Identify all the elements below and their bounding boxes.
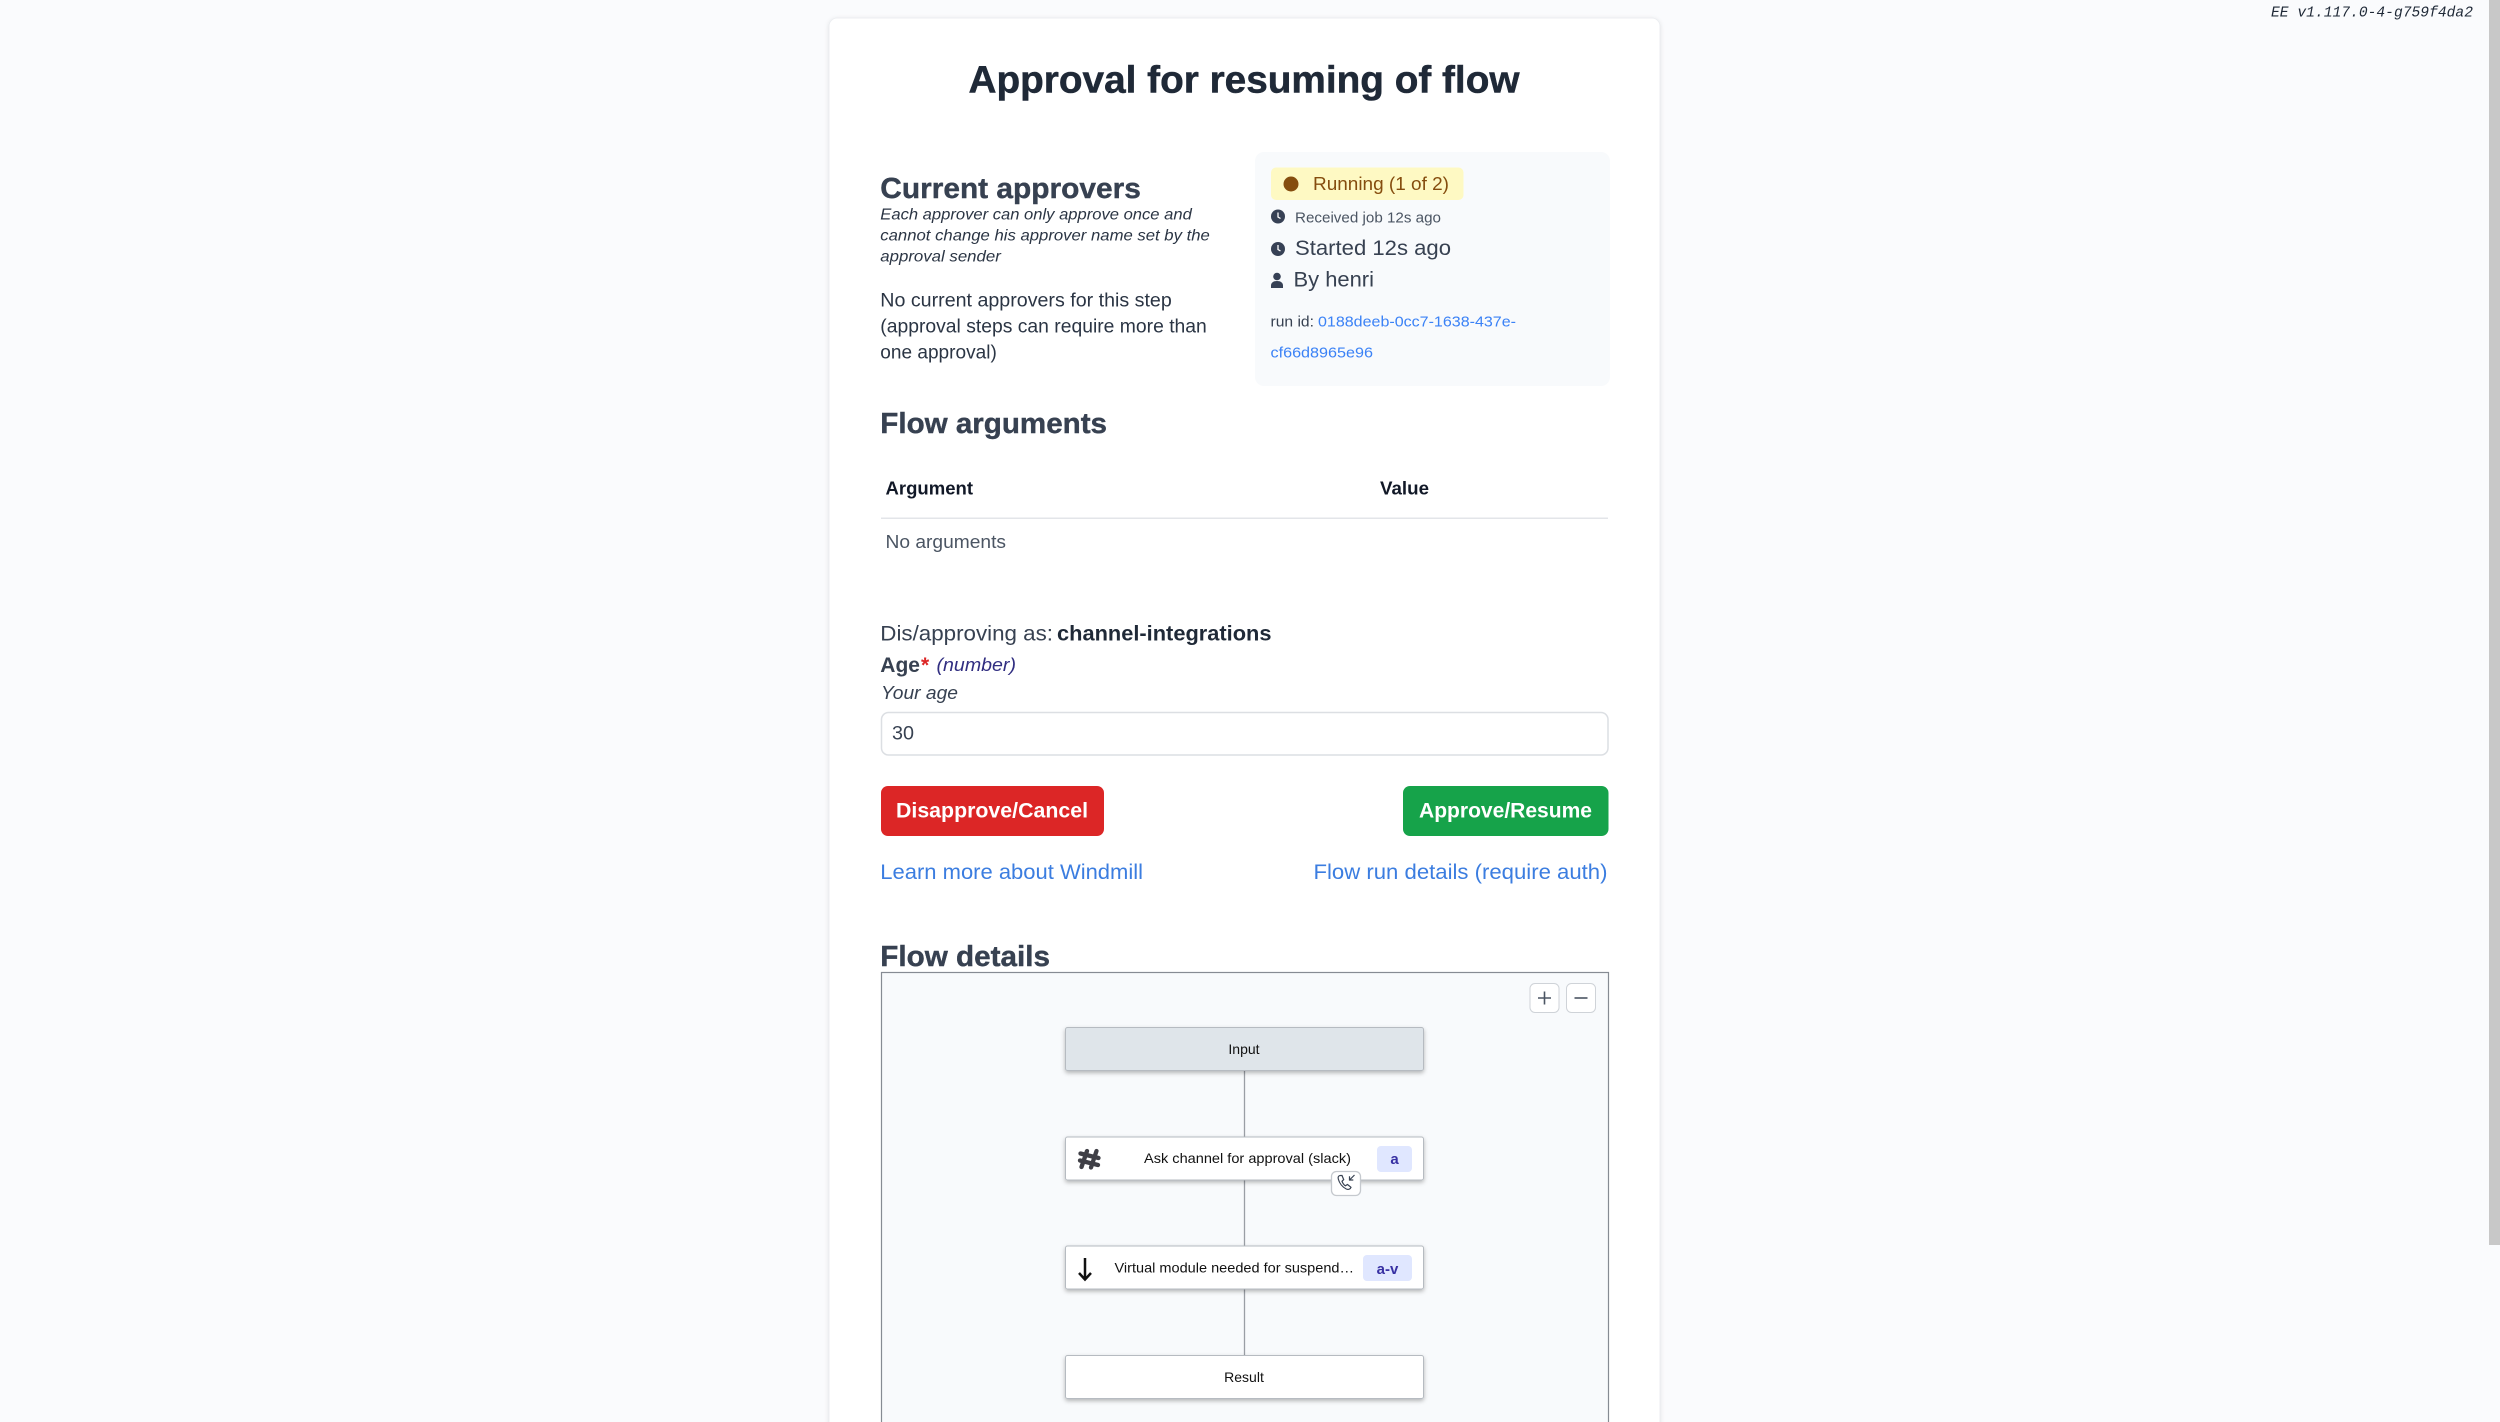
run id: cf66d8965e96 [1270,344,1373,362]
field label: age: (number) [936,655,1016,675]
node: result [1066,1356,1424,1398]
text block: approver note: Each approver can only approve once and [880,206,1193,224]
run id: 0188deeb-0cc7-1638-437e- [1318,314,1516,330]
node: result: Result [1224,1369,1264,1385]
arguments table [881,478,1608,552]
field label: age [880,654,1016,677]
node: virtual module: Virtual module needed for suspend… [1114,1260,1354,1276]
button: disapprove [881,786,1104,836]
arguments table: No arguments [886,532,1006,552]
button: approve [1403,786,1608,836]
button: approve: Approve/Resume [1419,800,1592,822]
text block: approver note [880,206,1210,266]
text block: no approvers [880,290,1207,364]
approver identity: channel-integrations [1057,622,1272,646]
approver identity [880,622,1272,646]
node: virtual module [1066,1246,1424,1289]
arguments table: Argument [886,478,973,498]
node: ask channel: Ask channel for approval (slack) [1144,1150,1351,1166]
link: learn more: Learn more about Windmill [880,861,1143,884]
icon: down arrow [1079,1258,1091,1280]
button: disapprove: Disapprove/Cancel [896,800,1088,822]
title: Approval for resuming of flow [968,60,1520,102]
icon: user [1271,273,1283,288]
suspend phone icon [1332,1172,1360,1196]
status badge: Running (1 of 2) [1313,174,1449,194]
edges [1244,1071,1246,1355]
run id [1270,314,1516,362]
age input [882,712,1608,755]
flow graph [882,972,1608,1422]
text block: no approvers: one approval) [880,342,997,364]
module id badge [1363,1255,1412,1281]
author text: By henri [1294,268,1374,292]
node: ask channel [1066,1137,1424,1196]
node: input [1066,1028,1424,1070]
arguments table: Value [1380,478,1429,498]
heading: flow arguments: Flow arguments [880,408,1107,440]
received text: Received job 12s ago [1295,210,1441,226]
field label: age: Age [880,654,920,677]
zoom in button [1530,984,1559,1012]
scrollbar thumb [2489,0,2500,1245]
panel: approval card [829,18,1660,1422]
icon: slack [1080,1151,1098,1168]
heading: flow details: Flow details [880,941,1050,973]
link: flow run details: Flow run details (require auth) [1314,861,1608,884]
field description: Your age [881,683,958,703]
approver identity: Dis/approving as: [880,622,1053,646]
icon: started clock [1271,242,1285,256]
module id badge [1377,1146,1412,1172]
module id badge: a-v [1377,1261,1399,1278]
text block: no approvers: No current approvers for this step [880,290,1172,312]
text block: no approvers: (approval steps can require more than [880,316,1207,338]
version label: EE v1.117.0-4-g759f4da2 [2271,6,2473,22]
zoom out button [1566,984,1596,1012]
node: input: Input [1228,1041,1260,1057]
run id: run id: [1270,314,1314,330]
age input: 30 [892,724,914,744]
text block: approver note: approval sender [880,248,1001,266]
heading: current approvers: Current approvers [880,173,1141,205]
panel: job status [1255,152,1610,386]
field label: age: * [921,654,930,677]
status badge [1271,168,1464,200]
module id badge: a [1390,1151,1399,1168]
started text: Started 12s ago [1295,237,1451,260]
icon: received clock [1271,210,1285,224]
text block: approver note: cannot change his approver name set by the [880,228,1210,244]
